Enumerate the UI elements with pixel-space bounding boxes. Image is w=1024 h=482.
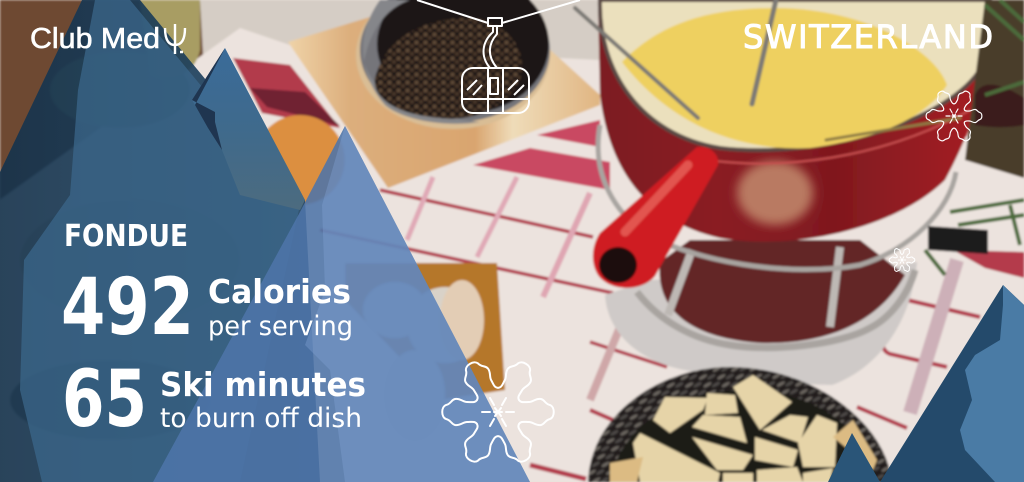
snowflake large [442,357,554,467]
dark mountain [0,0,320,482]
minutes number: 65 [62,355,147,445]
bread cubes [610,375,878,482]
light facet [960,285,1024,482]
left mountains group [0,0,530,482]
silver base skirt [605,262,917,385]
pot reflection [737,161,813,225]
minutes label: Ski minutes [160,365,366,404]
right mountain [880,285,1024,482]
right dark background with rosemary [965,0,1024,178]
melted cheese [622,8,947,148]
pot body [598,0,992,242]
black fork handle [928,226,988,254]
Club Med logo: Club Med [30,23,160,55]
small wooden board under overlay [345,263,505,400]
flour dusting [200,0,600,90]
icon: gondola [417,0,580,113]
small peak [192,48,305,210]
white wine glass [140,0,200,79]
serving board [288,17,600,188]
burner [660,240,905,343]
small right peak [828,433,880,482]
pot rim and cream interior [600,0,991,150]
mushrooms under overlay [363,282,483,440]
dark side [880,285,1024,482]
peppercorns [375,18,522,119]
right side red band [953,250,1024,278]
light facet [305,126,530,482]
red band by board [473,148,610,190]
silver base ring [637,270,915,348]
stand rods [668,247,840,327]
fondue forks [575,0,960,140]
red tablecloth stripes [320,177,1005,479]
dark fold shadow [250,88,340,126]
mid blue facets [20,0,300,482]
orange [255,115,345,205]
calories sublabel: per serving [208,311,353,342]
pepper bowl [356,0,550,129]
snowflake small [889,247,915,273]
light mountain [153,126,530,482]
small peak dark facet [192,48,225,150]
red fabric fold top left [233,58,340,128]
snowflake medium [926,89,982,143]
minutes sublabel: to burn off dish [160,403,362,434]
upper red band [537,120,600,147]
red pot handle [593,147,718,288]
bread under left overlay [10,52,240,440]
stats text block [61,219,366,445]
stand upper ring [598,125,956,270]
handle hole [599,247,637,283]
title: Switzerland: SWITZERLAND [743,18,993,56]
calories label: Calories [208,272,351,311]
wooden table [0,0,260,200]
dish name: FONDUE [64,219,188,254]
basket [588,367,892,482]
trident mark [165,24,185,54]
calories number: 492 [61,263,194,353]
